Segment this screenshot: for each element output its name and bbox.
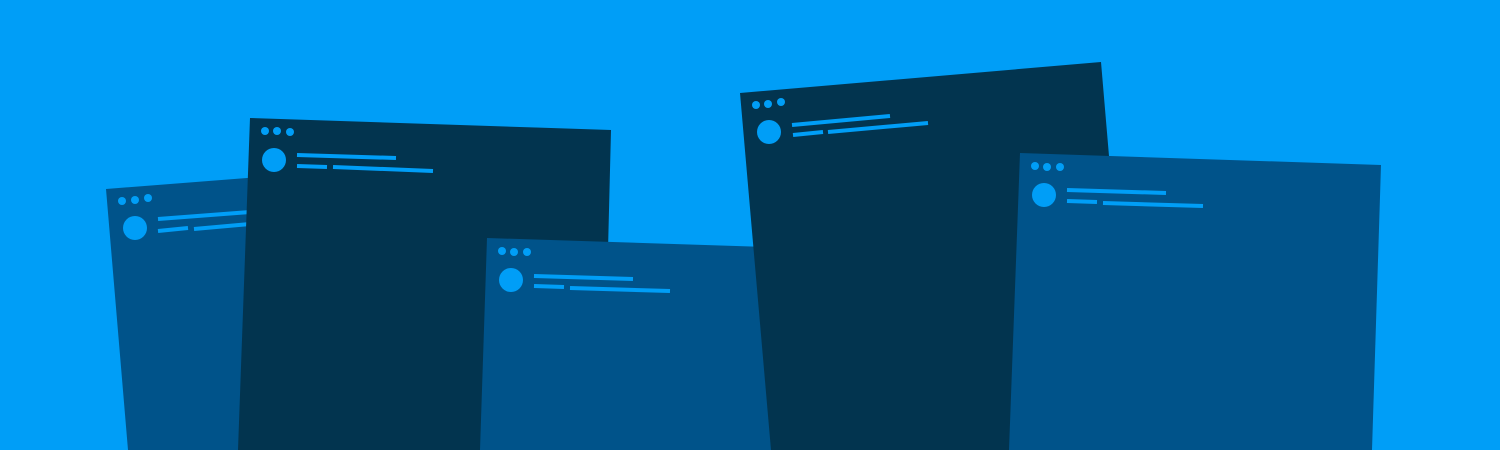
card 5: medium right [1009,153,1381,450]
card 2: dark [238,118,611,450]
card 1: medium back left [106,166,422,450]
card 3: medium middle [480,238,810,450]
card 4: dark [740,62,1134,450]
